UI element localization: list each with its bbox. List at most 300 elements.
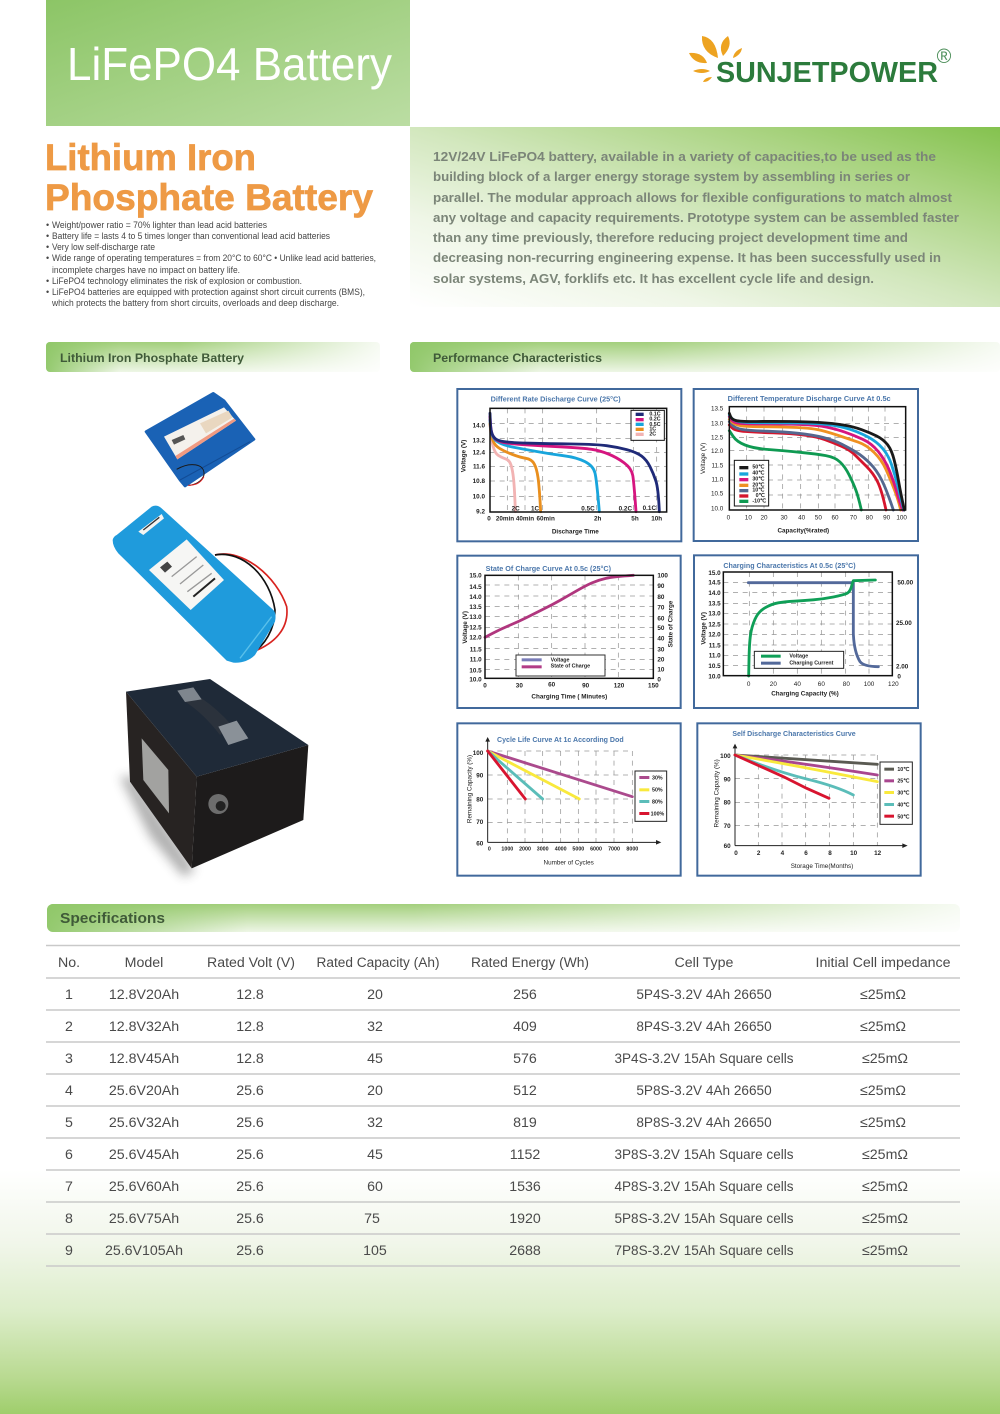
intro panel xyxy=(410,127,1000,307)
axis labels: 8000 xyxy=(626,847,638,853)
feature bullet list: LiFePO4 batteries are equipped with protection against short circuit currents (BMS), xyxy=(52,287,365,297)
banner title: LiFePO4 Battery xyxy=(67,38,392,90)
feature bullet list: • xyxy=(46,276,49,286)
axis labels: 90 xyxy=(582,682,590,689)
axis labels: 13.0 xyxy=(469,614,482,621)
feature bullet list: incomplete charges have no impact on battery life. xyxy=(52,265,240,275)
row 7: ≤25mΩ xyxy=(862,1179,908,1195)
row 7: 60 xyxy=(367,1179,383,1195)
row 4: 5P8S-3.2V 4Ah 26650 xyxy=(636,1083,772,1098)
self discharge lines xyxy=(735,755,877,798)
row 4: 25.6V20Ah xyxy=(109,1083,179,1099)
axis labels: Voltage (V) xyxy=(462,611,469,644)
axis labels: 100 xyxy=(473,750,484,757)
row 8 xyxy=(65,1211,908,1227)
axis labels: 40 xyxy=(798,515,806,522)
row 5: 25.6 xyxy=(236,1115,264,1131)
intro paragraph: decreasing non-recurring engineering expense. It has been successfully used in xyxy=(433,250,941,265)
axis labels: 90 xyxy=(724,776,731,783)
axis labels: Charging Capacity (%) xyxy=(771,690,839,697)
table header row: Cell Type xyxy=(675,955,734,971)
row 7: 25.6 xyxy=(236,1179,264,1195)
icon: small blue battery pack xyxy=(146,393,254,486)
axis labels: 0 xyxy=(657,676,661,683)
row 4: ≤25mΩ xyxy=(860,1083,906,1099)
legend: 50℃ xyxy=(752,463,764,470)
heading: Lithium Iron Phosphate Battery: Phosphate Battery xyxy=(45,177,373,218)
table header row: Rated Volt (V) xyxy=(207,955,295,971)
legend xyxy=(734,460,769,506)
row 2: ≤25mΩ xyxy=(860,1019,906,1035)
axis labels: 60 xyxy=(476,840,484,847)
feature bullet list: • xyxy=(46,242,49,252)
row 2: 32 xyxy=(367,1019,383,1035)
row 2: 8P4S-3.2V 4Ah 26650 xyxy=(636,1019,772,1034)
row 5: 5 xyxy=(65,1115,73,1131)
feature bullet list: Weight/power ratio = 70% lighter than lead acid batteries xyxy=(52,220,267,230)
table header row xyxy=(58,955,951,971)
axis labels: Voltage (V) xyxy=(700,443,707,474)
legend xyxy=(516,655,605,676)
row 4: 20 xyxy=(367,1083,383,1099)
axis labels: 20 xyxy=(760,515,768,522)
axis labels: 11.0 xyxy=(709,653,721,660)
legend: 40℃ xyxy=(752,470,764,477)
feature bullet list: • xyxy=(46,231,49,241)
axis labels: 0 xyxy=(487,515,491,522)
row 4 xyxy=(65,1083,906,1099)
row 5: ≤25mΩ xyxy=(860,1115,906,1131)
axis labels: 30 xyxy=(780,515,788,522)
legend: 50% xyxy=(652,788,663,794)
axis labels: Voltage (V) xyxy=(700,612,707,645)
axis labels: 40min xyxy=(516,515,534,522)
feature bullet list: • xyxy=(46,253,49,263)
axis labels: 100 xyxy=(896,515,907,522)
row 3 xyxy=(65,1051,908,1067)
axis labels: 12.0 xyxy=(711,448,724,455)
row 3: ≤25mΩ xyxy=(862,1051,908,1067)
row 5: 32 xyxy=(367,1115,383,1131)
axis labels: 0 xyxy=(747,681,751,688)
axis labels: 12.0 xyxy=(708,632,721,639)
row 5: 8P8S-3.2V 4Ah 26650 xyxy=(636,1115,772,1130)
row 6 xyxy=(65,1147,908,1163)
section bar: Performance Characteristics: Performance Characteristics xyxy=(433,351,602,365)
row 3: 45 xyxy=(367,1051,383,1067)
axis labels: 0.1C xyxy=(643,505,656,512)
axis labels: 0 xyxy=(734,850,738,857)
icon: sun rays xyxy=(689,36,742,82)
axis labels: Charging Time ( Minutes) xyxy=(531,694,607,701)
legend xyxy=(635,771,667,821)
table header row: Model xyxy=(125,955,163,971)
axis labels: 10.0 xyxy=(711,506,724,513)
axis labels: 8 xyxy=(828,850,832,857)
axis labels: 50 xyxy=(815,515,822,522)
axis labels: State of Charge xyxy=(667,600,674,647)
feature bullet list: LiFePO4 technology eliminates the risk of explosion or combustion. xyxy=(52,276,302,286)
legend: 20℃ xyxy=(752,481,764,488)
row 6: 3P8S-3.2V 15Ah Square cells xyxy=(614,1147,794,1162)
row 8: 5P8S-3.2V 15Ah Square cells xyxy=(614,1211,794,1226)
state of charge line xyxy=(485,575,633,637)
feature bullet list: which protects the battery from short circuits, overloads and deep discharge. xyxy=(51,298,339,308)
section bar: Performance Characteristics xyxy=(410,342,1000,372)
axis labels: 120 xyxy=(614,682,625,689)
row 6: 6 xyxy=(65,1147,73,1163)
axis labels: 12.5 xyxy=(469,625,482,632)
legend: State of Charge xyxy=(551,664,590,670)
legend: 100% xyxy=(651,811,665,817)
intro paragraph: solar systems, AGV, forklifs etc. It has excellent cycle life and design. xyxy=(433,271,874,286)
axis labels: 1C xyxy=(531,506,539,513)
row 9: 2688 xyxy=(509,1243,541,1259)
axis labels: 10.8 xyxy=(473,478,485,485)
axis labels: 10.5 xyxy=(708,663,721,670)
legend: 30% xyxy=(652,775,663,781)
feature bullet list: Very low self-discharge rate xyxy=(52,242,155,252)
row 8: 8 xyxy=(65,1211,73,1227)
legend: 10℃ xyxy=(752,487,764,494)
chart title: State Of Charge Curve At 0.5c (25°C) xyxy=(486,564,612,573)
table header row: Rated Capacity (Ah) xyxy=(316,955,440,971)
row 3: 3P4S-3.2V 15Ah Square cells xyxy=(614,1051,794,1066)
legend xyxy=(754,651,844,668)
axis labels: 50.00 xyxy=(897,580,914,587)
row 1: 5P4S-3.2V 4Ah 26650 xyxy=(636,987,772,1002)
row 8: 25.6V75Ah xyxy=(109,1211,179,1227)
row 6: 1152 xyxy=(510,1147,540,1163)
section bar: Lithium Iron Phosphate Battery: Lithium Iron Phosphate Battery xyxy=(60,351,244,365)
axis labels: 14.0 xyxy=(708,590,721,597)
legend: 25℃ xyxy=(897,778,909,785)
row 9: 25.6V105Ah xyxy=(105,1243,183,1259)
axis labels: 10.0 xyxy=(473,494,485,501)
axis labels: 50 xyxy=(657,625,665,632)
axis labels: 2C xyxy=(512,506,520,513)
row 1: 256 xyxy=(513,987,537,1003)
axis labels: 20 xyxy=(770,681,777,688)
axis labels: 70 xyxy=(850,515,857,522)
section bar: Lithium Iron Phosphate Battery xyxy=(46,342,380,372)
axis labels: Capacity(%rated) xyxy=(777,528,829,535)
row 3: 3 xyxy=(65,1051,73,1067)
axis labels: 100 xyxy=(720,753,731,760)
axis labels: 30 xyxy=(516,682,523,689)
axis labels: 13.2 xyxy=(473,438,485,445)
chart: charging characteristics xyxy=(694,555,918,708)
intro paragraph: than any time previously, therefore reducing project development time and xyxy=(433,230,908,245)
axis labels: Voltage (V) xyxy=(460,440,467,472)
logo wordmark: SUNJETPOWER xyxy=(716,57,938,89)
row 9 xyxy=(65,1243,908,1259)
axis labels: 100 xyxy=(657,572,668,579)
legend: 2C xyxy=(649,431,656,437)
row 7 xyxy=(65,1179,908,1195)
axis labels: 25.00 xyxy=(896,620,912,627)
axis labels: 150 xyxy=(648,682,659,689)
axis labels xyxy=(700,406,907,535)
axes with arrows xyxy=(735,747,903,846)
chart title: Different Rate Discharge Curve (25°C) xyxy=(491,395,621,404)
header banner xyxy=(46,0,410,126)
row 1: 20 xyxy=(367,987,383,1003)
axis labels: 120 xyxy=(888,681,899,688)
axis labels: 80 xyxy=(724,800,731,807)
axis labels: 40 xyxy=(657,636,665,643)
axis labels xyxy=(462,572,674,701)
axis labels: 11.5 xyxy=(711,462,724,469)
table header row: Rated Energy (Wh) xyxy=(471,955,589,971)
row 1: ≤25mΩ xyxy=(860,987,906,1003)
axis labels: 10.0 xyxy=(469,676,482,683)
intro paragraph: any voltage and capacity requirements. Prototype system can be assembled faster xyxy=(433,210,959,225)
specifications table xyxy=(46,946,960,1266)
chart: self discharge characteristics xyxy=(697,723,921,876)
chart: different rate discharge curve xyxy=(457,389,681,541)
axis labels: 10 xyxy=(745,515,752,522)
axis labels: 80 xyxy=(476,796,484,803)
axis labels: 0 xyxy=(727,515,731,522)
axis labels: 11.5 xyxy=(470,647,482,654)
voltage line xyxy=(749,580,875,676)
background: bottom green gradient xyxy=(0,1170,1000,1414)
row 1: 1 xyxy=(65,987,73,1003)
axis labels: 30 xyxy=(657,646,665,653)
legend: 0.2C xyxy=(649,417,661,423)
axis labels: 2000 xyxy=(519,847,531,853)
axis labels: 6 xyxy=(804,850,808,857)
registered mark: ® xyxy=(937,46,952,68)
cycle life lines xyxy=(488,751,632,799)
row 9: 7P8S-3.2V 15Ah Square cells xyxy=(614,1243,794,1258)
intro paragraph xyxy=(433,149,959,286)
row 2 xyxy=(65,1019,906,1035)
axis labels: 0.5C xyxy=(581,506,595,513)
axis labels: 90 xyxy=(883,515,891,522)
axis labels: 20min xyxy=(496,515,514,522)
row 5 xyxy=(65,1115,906,1131)
axis labels: 10h xyxy=(651,515,662,522)
axis labels: 4 xyxy=(781,850,785,857)
chart: cycle life curve xyxy=(457,723,681,876)
axis labels: 70 xyxy=(476,819,484,826)
axis labels: 13.5 xyxy=(708,601,721,608)
row 4: 25.6 xyxy=(236,1083,264,1099)
icon: black battery case xyxy=(120,679,308,877)
axis labels: 11.5 xyxy=(709,642,721,649)
axis labels: 10.5 xyxy=(469,667,482,674)
row 7: 25.6V60Ah xyxy=(109,1179,179,1195)
legend: 1C xyxy=(649,426,656,432)
intro paragraph: parallel. The modular approach allows for flexible configurations to match almost xyxy=(433,190,953,205)
chart title: Different Temperature Discharge Curve At 0.5c xyxy=(728,394,891,403)
axis labels: 3000 xyxy=(537,847,549,853)
row 8: 75 xyxy=(364,1211,380,1227)
axis labels: 100 xyxy=(864,681,875,688)
row 7: 4P8S-3.2V 15Ah Square cells xyxy=(614,1179,794,1194)
charging current line xyxy=(748,583,878,667)
legend xyxy=(880,762,912,824)
row 8: ≤25mΩ xyxy=(862,1211,908,1227)
row 4: 512 xyxy=(513,1083,537,1099)
axis labels: 10.0 xyxy=(708,673,721,680)
axis labels: 13.5 xyxy=(711,406,724,413)
row 8: 25.6 xyxy=(236,1211,264,1227)
axis labels: 12.5 xyxy=(711,435,724,442)
axis labels: 12.0 xyxy=(469,635,482,642)
section bar: Specifications xyxy=(47,904,960,932)
chart title: Self Discharge Characteristics Curve xyxy=(732,729,856,738)
axis labels: 10 xyxy=(850,850,858,857)
axis labels xyxy=(460,422,662,536)
axis labels: 0 xyxy=(483,682,487,689)
legend: Charging Current xyxy=(789,661,834,667)
axis labels: Storage Time(Months) xyxy=(791,863,853,870)
axis labels: 40 xyxy=(794,681,801,688)
row 2: 12.8V32Ah xyxy=(109,1019,179,1035)
chart title: Cycle Life Curve At 1c According Dod xyxy=(497,735,624,744)
axis labels: 0.2C xyxy=(619,506,632,513)
axis labels: 2h xyxy=(594,515,601,522)
axis labels: 14.5 xyxy=(469,584,482,591)
feature bullet list xyxy=(46,220,376,308)
axis labels: 5h xyxy=(631,515,639,522)
discharge curves xyxy=(490,413,659,512)
feature bullet list: • xyxy=(46,287,49,297)
row 4: 4 xyxy=(65,1083,73,1099)
legend: -10℃ xyxy=(752,498,766,505)
axis labels: 60 xyxy=(548,681,556,688)
axis labels: 14.5 xyxy=(708,580,721,587)
intro paragraph: 12V/24V LiFePO4 battery, available in a variety of capacities,to be used as the xyxy=(433,149,936,164)
axis labels: 4000 xyxy=(555,847,567,853)
temperature curves xyxy=(729,413,904,510)
legend xyxy=(631,410,664,440)
axis labels: 80 xyxy=(657,594,665,601)
axis labels: 10 xyxy=(657,667,665,674)
feature bullet list: Battery life = lasts 4 to 5 times longer than conventional lead acid batteries xyxy=(52,231,330,241)
axis labels: 60 xyxy=(724,843,731,850)
axis labels: 11.6 xyxy=(473,464,485,471)
heading: Lithium Iron Phosphate Battery: Lithium Iron xyxy=(45,137,256,178)
intro paragraph: building block of a larger energy storage system by assembling in series or xyxy=(433,169,910,184)
row 2: 2 xyxy=(65,1019,73,1035)
row 8: 1920 xyxy=(509,1211,541,1227)
axis labels: 13.0 xyxy=(711,421,724,428)
axis labels: 15.0 xyxy=(708,570,721,577)
axis labels: 2.00 xyxy=(896,664,909,671)
row 7: 7 xyxy=(65,1179,73,1195)
axis labels: 20 xyxy=(657,657,665,664)
axis labels: 1000 xyxy=(501,847,513,853)
axis labels: 7000 xyxy=(608,847,620,853)
row 2: 409 xyxy=(513,1019,537,1035)
legend: Voltage xyxy=(789,654,808,660)
axis labels: 6000 xyxy=(590,847,602,853)
row 3: 12.8 xyxy=(236,1051,264,1067)
axis labels: Number of Cycles xyxy=(544,860,594,867)
logo: Sunjetpower xyxy=(689,36,952,89)
row 5: 25.6V32Ah xyxy=(109,1115,179,1131)
legend: 30℃ xyxy=(752,476,764,483)
row 2: 12.8 xyxy=(236,1019,264,1035)
axis labels: 90 xyxy=(657,583,665,590)
chart: different temperature discharge curve xyxy=(694,389,918,541)
axis labels: 15.0 xyxy=(469,573,482,580)
row 7: 1536 xyxy=(509,1179,541,1195)
axis labels: 12.4 xyxy=(473,450,485,457)
feature bullet list: • xyxy=(46,220,49,230)
icon: flat blue battery pack with wires xyxy=(113,506,287,663)
chart title: Charging Characteristics At 0.5c (25°C) xyxy=(723,561,856,570)
table header row: No. xyxy=(58,955,80,971)
legend: 40℃ xyxy=(897,802,909,809)
row 5: 819 xyxy=(513,1115,537,1131)
axis labels: 11.0 xyxy=(470,657,482,664)
legend: 0.1C xyxy=(649,412,661,418)
axis labels: 12 xyxy=(874,850,882,857)
axis labels: 60 xyxy=(818,681,825,688)
legend: 30℃ xyxy=(897,790,909,797)
axis labels xyxy=(714,753,882,870)
row 9: 9 xyxy=(65,1243,73,1259)
axis labels: 12.5 xyxy=(708,621,721,628)
axis labels xyxy=(700,570,914,697)
axis labels: 80 xyxy=(843,681,850,688)
axis labels: 80 xyxy=(866,515,873,522)
axis labels: 14.0 xyxy=(473,422,485,429)
row 1: 12.8V20Ah xyxy=(109,987,179,1003)
axis labels: 90 xyxy=(476,772,484,779)
axis labels: 0 xyxy=(488,847,491,853)
row 6: 45 xyxy=(367,1147,383,1163)
row 6: 25.6 xyxy=(236,1147,264,1163)
legend: 50℃ xyxy=(897,813,909,820)
legend: 0.5C xyxy=(649,422,661,428)
section bar: Specifications: Specifications xyxy=(60,910,165,927)
axis labels: 70 xyxy=(724,823,731,830)
axis labels: Discharge Time xyxy=(552,529,599,536)
axis labels: 0 xyxy=(897,673,901,680)
row 9: 25.6 xyxy=(236,1243,264,1259)
row 3: 576 xyxy=(513,1051,537,1067)
axis labels: Remaining Capacity (%) xyxy=(714,759,721,827)
axis labels: 70 xyxy=(657,605,665,612)
axis labels: 60 xyxy=(831,515,839,522)
row 9: 105 xyxy=(363,1243,387,1259)
row 1: 12.8 xyxy=(236,987,264,1003)
row 6: ≤25mΩ xyxy=(862,1147,908,1163)
axis labels: 13.5 xyxy=(469,604,482,611)
row 1 xyxy=(65,987,906,1003)
table header row: Initial Cell impedance xyxy=(816,955,951,971)
axis labels: 13.0 xyxy=(708,610,721,617)
axis labels: 5000 xyxy=(572,847,584,853)
heading: Lithium Iron Phosphate Battery xyxy=(45,137,373,218)
row 3: 12.8V45Ah xyxy=(109,1051,179,1067)
feature bullet list: Wide range of operating temperatures = from 20°C to 60°C • Unlike lead acid batteries, xyxy=(52,253,376,263)
legend: 10℃ xyxy=(897,766,909,773)
legend: 0℃ xyxy=(756,492,765,499)
axes with arrows xyxy=(488,740,657,842)
axis labels xyxy=(466,750,638,867)
axis labels: 2 xyxy=(757,850,761,857)
legend: Voltage xyxy=(551,658,570,664)
axis labels: 11.0 xyxy=(711,476,724,483)
axis labels: Remaining Capacity (%) xyxy=(466,755,473,823)
